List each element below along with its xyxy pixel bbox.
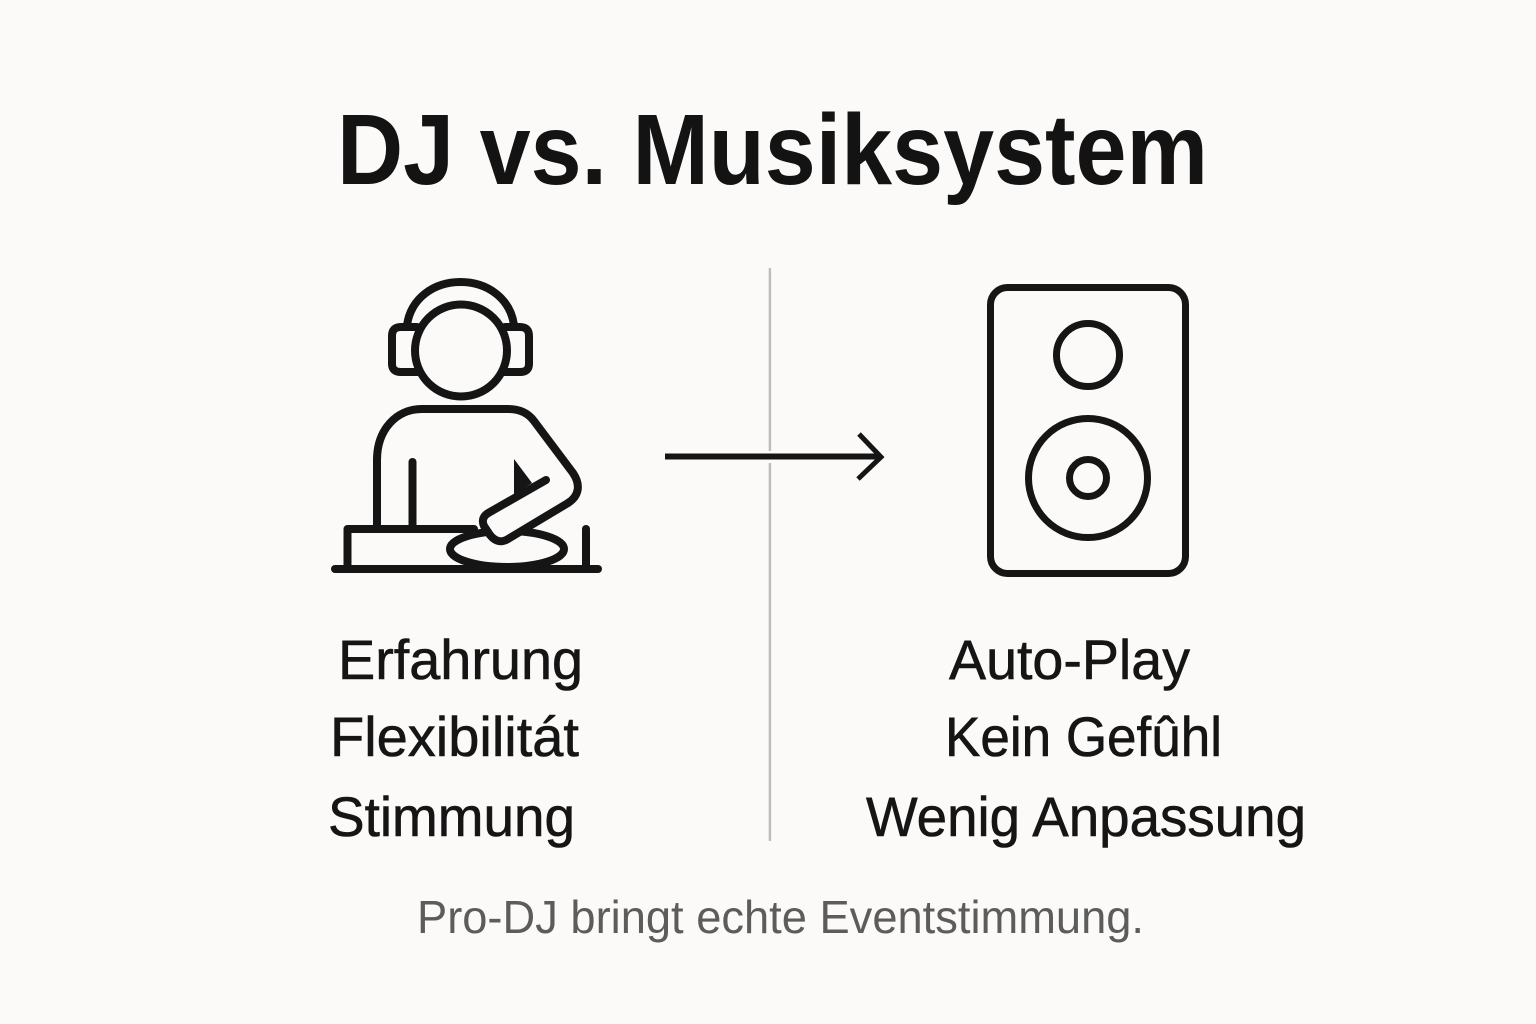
woofer center bbox=[1070, 460, 1106, 496]
right list: music system drawbacks: Kein Gefûhl bbox=[945, 705, 1222, 768]
left list: DJ strengths: Flexibilitát bbox=[330, 705, 579, 768]
right list: music system drawbacks: Wenig Anpassung bbox=[866, 785, 1306, 848]
icon: speaker bbox=[990, 288, 1186, 574]
head bbox=[415, 304, 507, 396]
mixer box bbox=[348, 529, 474, 568]
table line bbox=[335, 565, 598, 573]
inner arm line bbox=[408, 462, 416, 526]
footer note: Pro-DJ bringt echte Eventstimmung. bbox=[417, 891, 1144, 943]
arrow bbox=[665, 434, 881, 479]
torso outline bbox=[377, 409, 578, 526]
headband bbox=[407, 282, 514, 325]
left list: DJ strengths: Erfahrung bbox=[338, 628, 583, 691]
right ear cup bbox=[503, 327, 529, 372]
woofer bbox=[1028, 418, 1148, 538]
left ear cup bbox=[392, 327, 420, 372]
left list: DJ strengths: Stimmung bbox=[328, 785, 575, 848]
turntable platter bbox=[450, 531, 564, 567]
speaker cabinet bbox=[990, 288, 1186, 574]
forearm fill bbox=[483, 480, 568, 541]
title: DJ vs. Musiksystem bbox=[337, 94, 1208, 206]
right list: music system drawbacks: Auto-Play bbox=[949, 628, 1190, 691]
hand thumb bbox=[514, 459, 532, 495]
icon: DJ at turntable bbox=[335, 282, 598, 569]
forearm outline bbox=[483, 480, 568, 541]
tweeter bbox=[1056, 324, 1120, 386]
right list: music system drawbacks bbox=[866, 628, 1306, 848]
left list: DJ strengths bbox=[328, 628, 583, 848]
right post bbox=[582, 529, 590, 568]
